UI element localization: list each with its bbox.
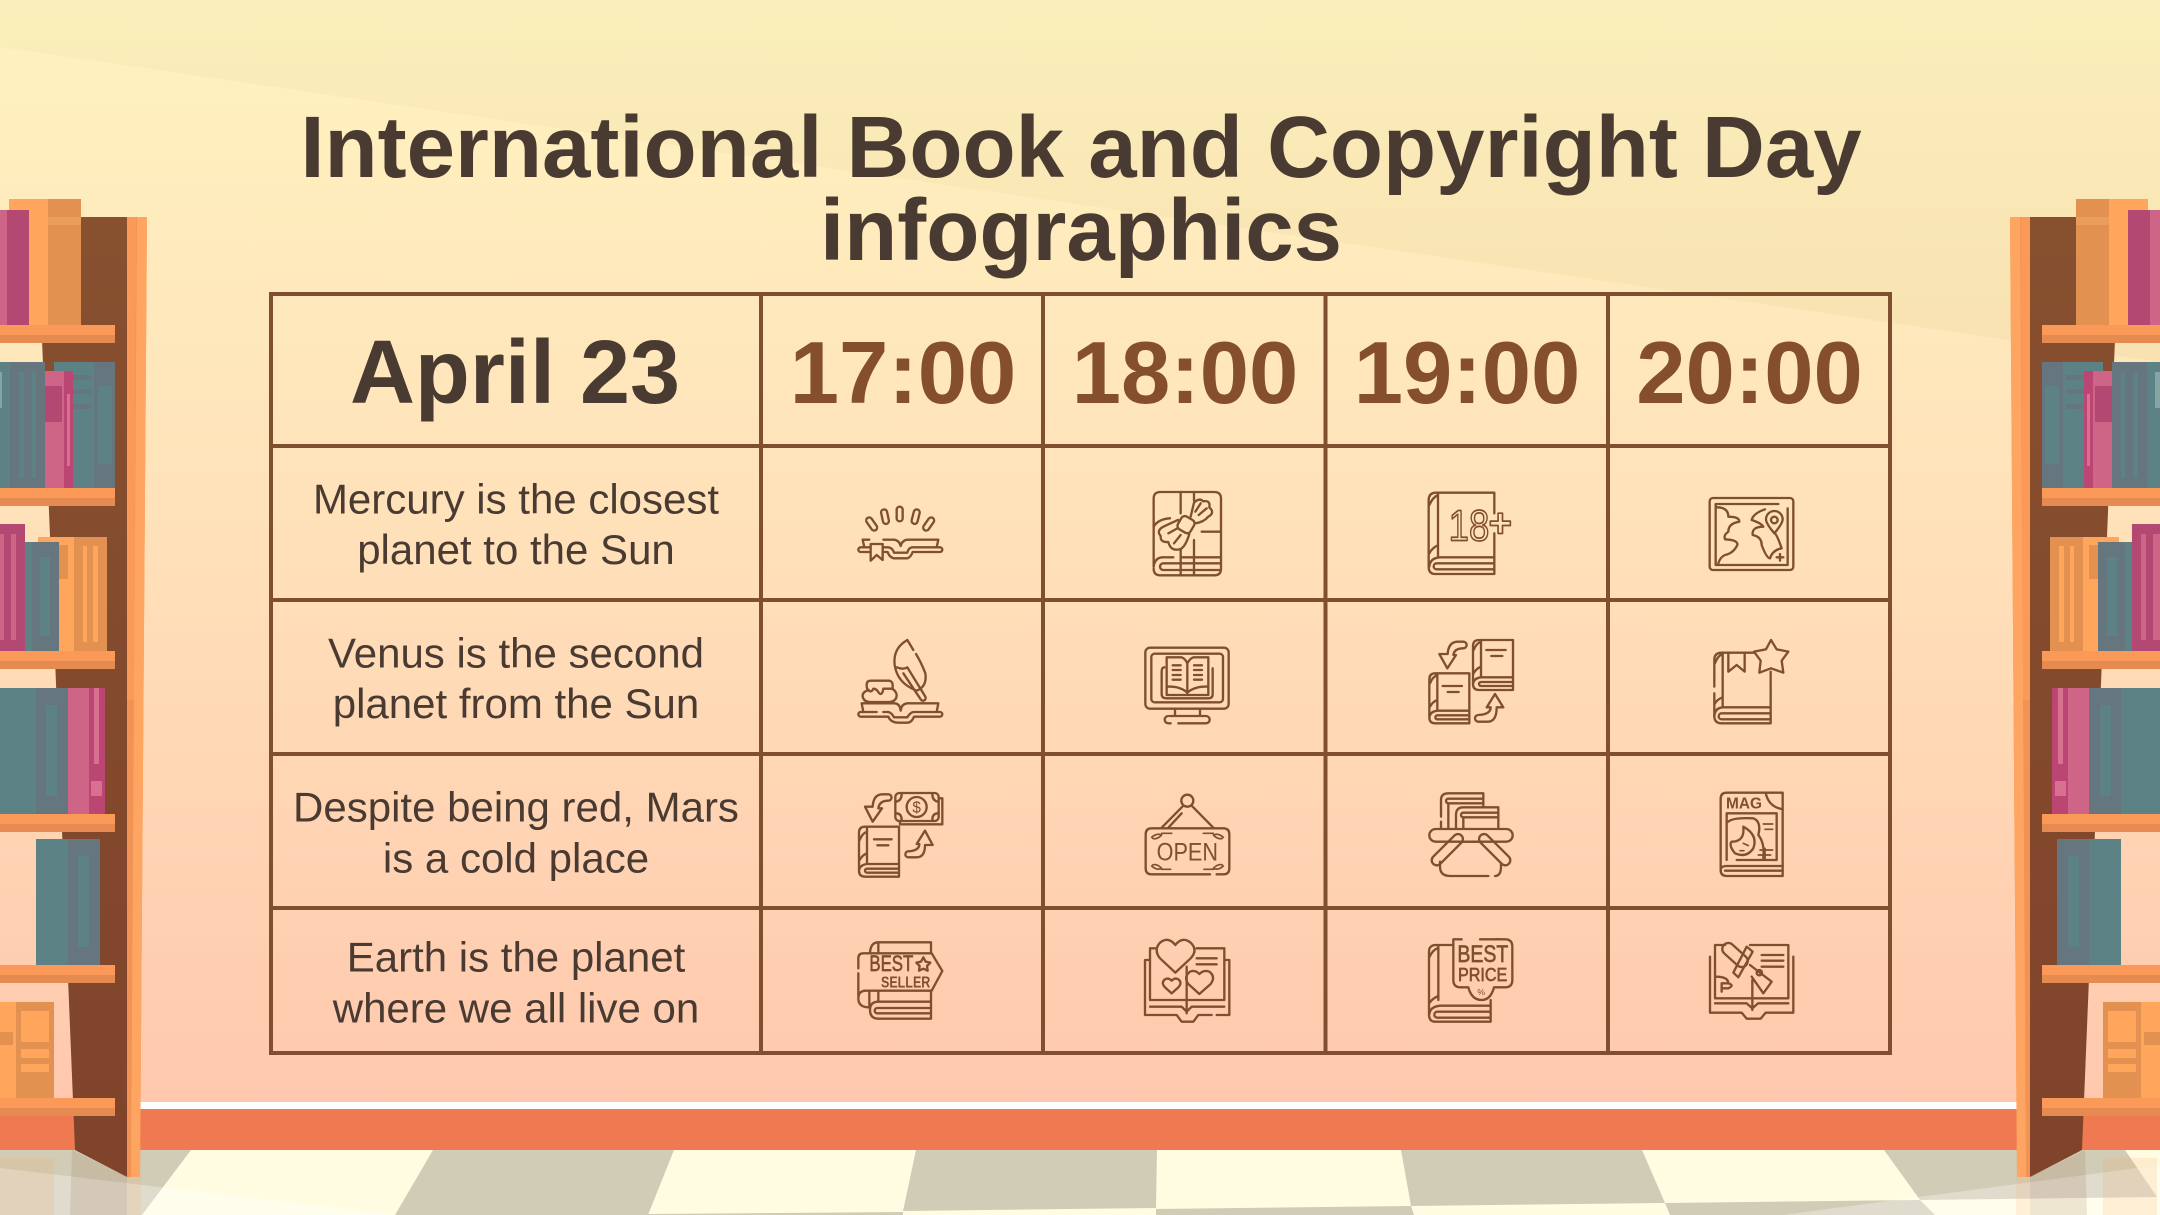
icon: open book with rays (858, 507, 942, 561)
icon: best seller book: BEST (869, 951, 913, 976)
table header: date: April 23 (350, 323, 680, 423)
icon: hearts book (1145, 940, 1229, 1022)
row label: Mercury: planet to the Sun (357, 526, 675, 573)
icons row 1 and 2, columns 3 and 4 (1429, 493, 1793, 723)
icon: open sign: OPEN (1157, 839, 1218, 866)
table header: hours: 19:00 (1354, 323, 1580, 422)
icon: book on monitor (1145, 648, 1229, 723)
icon: 18+ book: 18 (1449, 502, 1489, 551)
icon: best seller book: SELLER (881, 974, 931, 991)
left bookcase (0, 199, 147, 1177)
icon: best seller book (858, 942, 942, 1019)
checkered floor (0, 1150, 2160, 1215)
row label: Earth: Earth is the planet (347, 934, 686, 980)
icon: best price book: BEST (1457, 941, 1509, 968)
baseboard (0, 1109, 2160, 1150)
right bookcase (2010, 199, 2160, 1177)
icon: 18+ book (1429, 493, 1512, 574)
title: International Book and Copyright Day (300, 99, 1862, 196)
row label: Venus: planet from the Sun (333, 680, 699, 727)
table header: hours (790, 323, 1863, 422)
icon: book with star (1714, 640, 1788, 723)
wall white trim (0, 1102, 2160, 1109)
icon: magazine (1721, 793, 1783, 876)
icon: 18+ book: + (1489, 502, 1512, 546)
icon: book exchange (1429, 640, 1513, 723)
icons row 1 and 2, columns 1 and 2 (858, 492, 1229, 723)
icon: open sign (1146, 795, 1229, 874)
title: infographics (820, 182, 1342, 279)
row label: Earth: where we all live on (332, 984, 699, 1032)
row label: Mars: is a cold place (383, 834, 649, 882)
row label: Mars: Despite being red, Mars (293, 784, 739, 830)
schedule table (271, 294, 1890, 1053)
icon: map with pin (1710, 498, 1793, 570)
icons row 3 and 4, columns 1 and 2 (858, 793, 1229, 1022)
icon: magazine: MAG (1726, 796, 1762, 813)
icon: best price book: % (1477, 987, 1485, 997)
table header: hours: 20:00 (1636, 323, 1863, 422)
icons row 3 and 4, columns 3 and 4 (1429, 793, 1793, 1022)
background light beam (0, 0, 2160, 362)
row label: Mercury: Mercury is the closest (313, 476, 719, 522)
icon: quill and ink on book (858, 640, 942, 723)
icon: pen on book (1710, 941, 1793, 1019)
row label: Venus: Venus is the second (328, 630, 704, 676)
icon: best price book: PRICE (1458, 964, 1507, 985)
icon: gift book (1154, 492, 1221, 575)
icon: best price book (1429, 939, 1512, 1022)
table header: hours: 17:00 (790, 323, 1016, 422)
icon: money for book exchange: $ (912, 800, 921, 817)
icon: money for book exchange (859, 793, 942, 877)
table header: hours: 18:00 (1072, 323, 1298, 422)
icon: basket of books (1429, 793, 1513, 876)
